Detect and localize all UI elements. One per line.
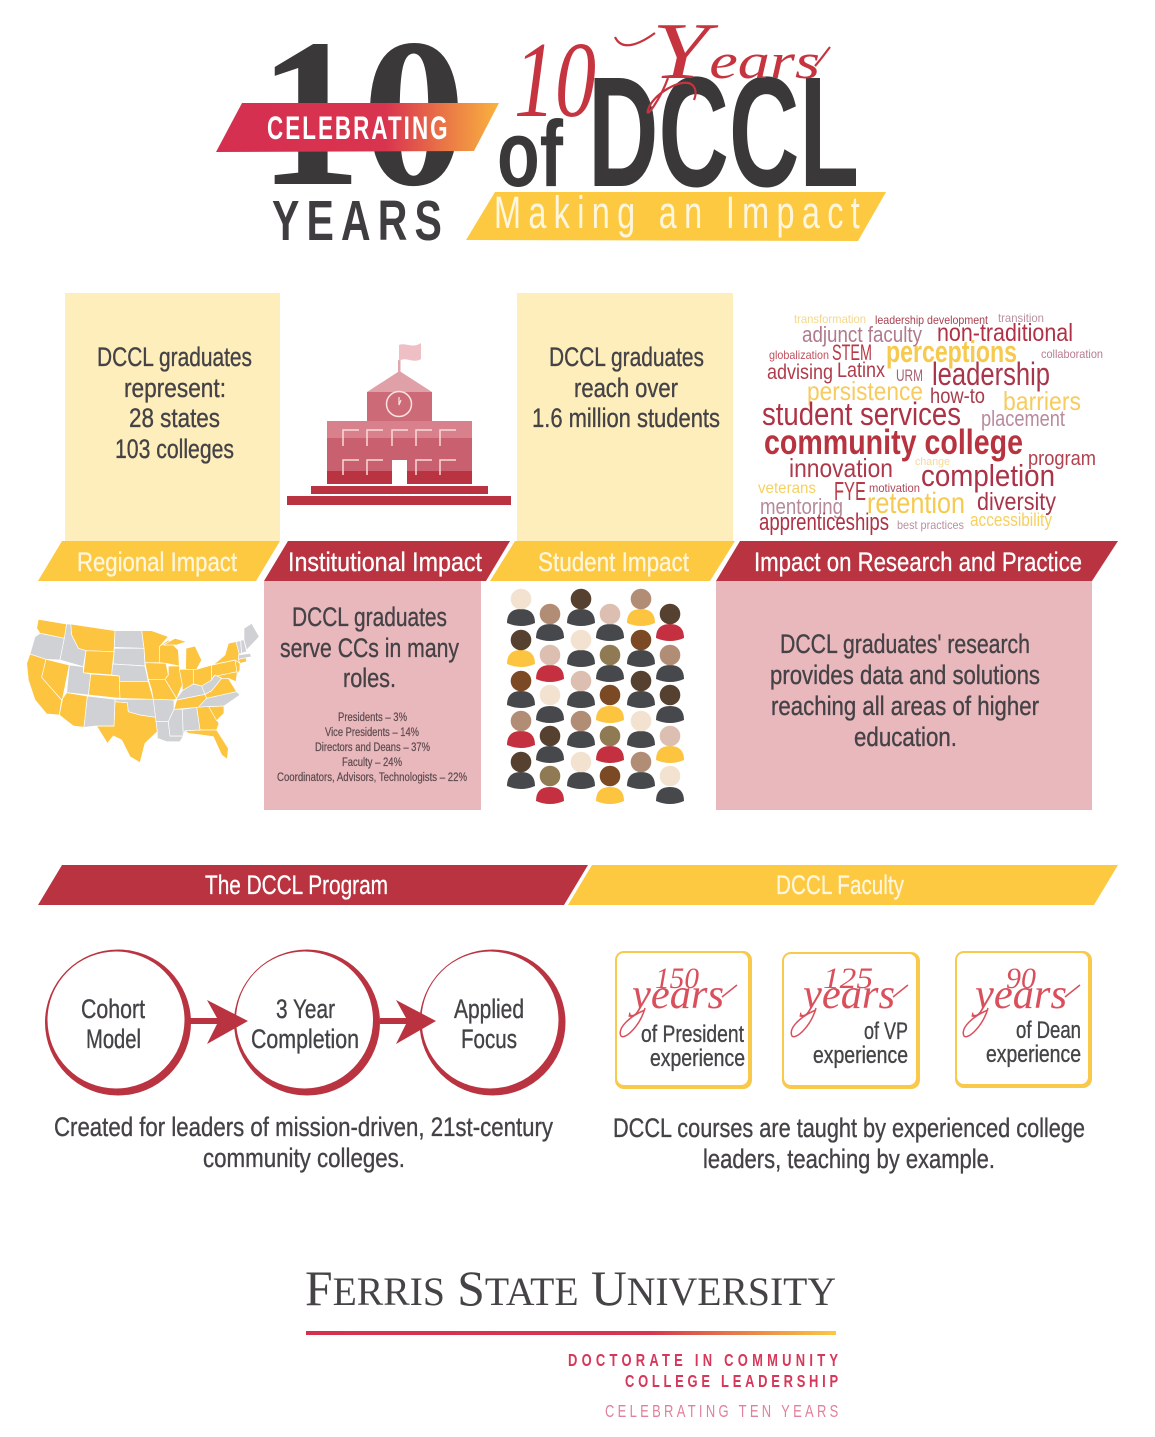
panel: student cream: reach over [574, 373, 678, 403]
card: VP experience: years [799, 972, 895, 1018]
word cloud: completion [921, 458, 1055, 493]
card: dean experience: of Dean [1016, 1017, 1081, 1044]
word cloud: FYE [834, 476, 866, 506]
of DCCL heading [497, 45, 859, 220]
panel: regional cream: 103 colleges [115, 434, 234, 464]
of DCCL heading: DCCL [588, 45, 859, 220]
card: president experience [615, 951, 752, 1089]
card: president experience: years [628, 972, 724, 1018]
panel: institutional roles: Presidents – 3% [338, 712, 407, 724]
word cloud: perceptions [886, 334, 1017, 369]
word cloud: persistence [807, 376, 923, 406]
word cloud: best practices [897, 518, 964, 532]
banner: the DCCL program [38, 865, 588, 905]
word cloud: transition [998, 311, 1044, 325]
word cloud: advising [767, 361, 833, 384]
word cloud: Latinx [837, 359, 885, 382]
icon: college building [287, 343, 511, 505]
word cloud: collaboration [1041, 347, 1103, 361]
panel: regional cream [65, 293, 280, 541]
caption: program: Created for leaders of mission-driven, 21st-century [54, 1112, 553, 1142]
circle: 3 year completion: 3 Year [276, 994, 335, 1024]
panel: institutional roles: Coordinators, Advisors, Technologists – 22% [277, 772, 467, 784]
caption: program [54, 1112, 553, 1173]
word cloud: veterans [758, 480, 816, 497]
script Years: Y ears [652, 8, 820, 96]
ribbon: research and practice: Impact on Research and Practice [754, 547, 1082, 577]
word cloud: innovation [789, 453, 893, 483]
doctorate line: DOCTORATE IN COMMUNITY [568, 1351, 838, 1371]
word cloud: program [1028, 448, 1096, 470]
circle: 3 year completion: Completion [251, 1024, 359, 1054]
word cloud: leadership development [875, 313, 989, 327]
word cloud: diversity [977, 488, 1056, 516]
panel: research impact: DCCL graduates' research [780, 629, 1030, 659]
word cloud: motivation [869, 481, 920, 495]
circle: cohort model: Model [86, 1024, 141, 1054]
word cloud: apprenticeships [759, 509, 889, 536]
panel: student cream: DCCL graduates [549, 342, 704, 372]
card: VP experience: experience [813, 1042, 908, 1069]
title: big 10 years logo [216, 0, 499, 253]
card: dean experience: years [971, 972, 1067, 1018]
word cloud: community college [764, 423, 1023, 462]
banner: DCCL faculty: DCCL Faculty [776, 870, 904, 900]
panel: institutional roles: DCCL graduates [292, 602, 447, 632]
panel: research impact: provides data and solutions [770, 660, 1040, 690]
panel: institutional roles: roles. [343, 663, 396, 693]
celebrating ten years: CELEBRATING TEN YEARS [605, 1402, 838, 1422]
celebrating ribbon [216, 103, 499, 152]
panel: student cream: 1.6 million students [532, 403, 720, 433]
word cloud: adjunct faculty [802, 322, 922, 347]
word cloud: STEM [832, 340, 872, 365]
circle: applied focus: Applied [454, 994, 524, 1024]
banner: DCCL faculty [568, 865, 1118, 905]
big numeral 10: 10 [258, 0, 466, 230]
program flow diagram [45, 950, 566, 1096]
panel: regional cream: 28 states [129, 403, 220, 433]
ribbon: institutional impact: Institutional Impact [288, 547, 482, 577]
arrow: cohort to completion [190, 1000, 248, 1044]
caption: faculty: leaders, teaching by example. [703, 1144, 995, 1174]
doctorate line [568, 1351, 838, 1392]
ribbon: research and practice [716, 541, 1118, 581]
years word: YEARS [272, 188, 442, 253]
doctorate line: COLLEGE LEADERSHIP [625, 1372, 838, 1392]
word cloud: student services [762, 396, 961, 432]
word cloud: leadership [932, 356, 1050, 392]
footer: Ferris State University logo [305, 1260, 838, 1422]
panel: research impact: reaching all areas of higher [771, 691, 1039, 721]
making an impact ribbon: Making an Impact [494, 189, 860, 238]
card: VP experience [782, 952, 920, 1089]
ribbon: regional impact: Regional Impact [77, 547, 237, 577]
arrow: completion to applied [380, 1000, 436, 1044]
panel: regional cream: DCCL graduates [97, 342, 252, 372]
panel: student cream [517, 293, 733, 541]
panel: institutional roles: Faculty – 24% [342, 757, 402, 769]
word cloud: change [915, 456, 950, 468]
caption: program: community colleges. [203, 1143, 405, 1173]
celebrating ribbon: CELEBRATING [267, 110, 448, 146]
circle: applied focus [420, 950, 566, 1096]
word cloud: placement [981, 406, 1065, 431]
title: 10 Years of DCCL [497, 8, 859, 220]
word cloud: retention [867, 487, 965, 520]
word cloud: globalization [769, 348, 829, 362]
circle: cohort model: Cohort [81, 994, 145, 1024]
circle: cohort model [45, 950, 191, 1096]
panel: institutional roles: serve CCs in many [280, 633, 459, 663]
ribbon: student impact [490, 541, 735, 581]
map: US states [27, 619, 259, 763]
circle: applied focus: Focus [461, 1024, 517, 1054]
word cloud: accessibility [970, 510, 1052, 530]
university name: FERRIS STATE UNIVERSITY [305, 1260, 836, 1316]
card: VP experience: of VP [864, 1018, 908, 1045]
card: president experience: 150 [655, 962, 699, 995]
of DCCL heading: of [497, 101, 564, 206]
word cloud: URM [896, 366, 923, 385]
panel: research impact [716, 581, 1092, 810]
panel: institutional roles: Directors and Deans – 37% [315, 742, 430, 754]
panel: regional cream: represent: [124, 373, 226, 403]
word cloud: transformation [794, 312, 866, 326]
script Years [615, 8, 830, 113]
word cloud: how-to [930, 385, 985, 408]
circle: 3 year completion [234, 950, 380, 1096]
card: president experience: of President [641, 1021, 744, 1048]
card: dean experience [955, 951, 1092, 1088]
people illustration [507, 589, 684, 804]
word cloud: non-traditional [937, 319, 1073, 347]
word cloud: mentoring [760, 494, 843, 519]
banner: the DCCL program: The DCCL Program [205, 870, 388, 900]
card: dean experience: 90 [1006, 962, 1036, 995]
word cloud: barriers [1003, 386, 1081, 416]
caption: faculty [613, 1113, 1085, 1174]
card: dean experience: experience [986, 1041, 1081, 1068]
panel: institutional roles: Vice Presidents – 14% [325, 727, 419, 739]
ribbon: regional impact [38, 541, 280, 581]
word cloud [758, 311, 1103, 536]
script 10: 10 [514, 21, 596, 140]
panel: institutional roles [264, 581, 481, 810]
card: VP experience: 125 [823, 962, 873, 995]
ribbon: student impact: Student Impact [538, 547, 689, 577]
ribbon: institutional impact [264, 541, 510, 581]
card: president experience: experience [650, 1045, 745, 1072]
panel: research impact: education. [854, 722, 957, 752]
